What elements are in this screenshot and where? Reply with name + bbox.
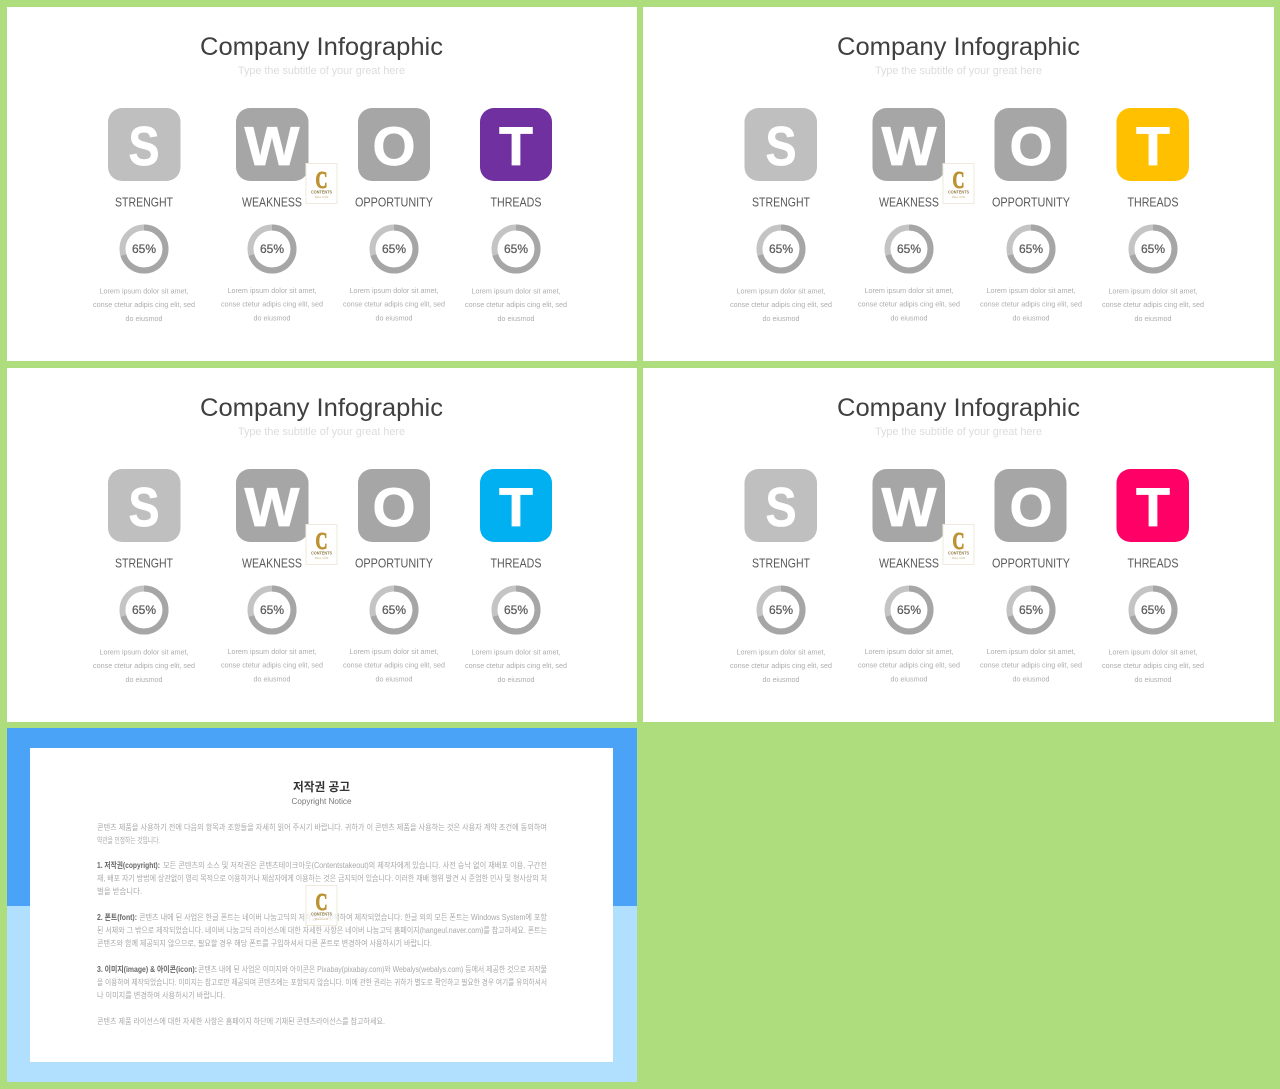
donut: T 65% [494,228,538,270]
text: S description: Lorem ipsum dolor sit amet, [100,286,188,296]
subtitle: Type the subtitle of your great here [875,426,1042,438]
text: T description: conse ctetur adipis cing elit, sed [1102,661,1204,670]
tile: W: W [244,476,300,538]
tile: T [480,469,552,542]
text: T description: do eiusmod [1134,675,1172,684]
text: S description: do eiusmod [762,675,800,684]
text: S description [93,286,195,323]
text: S description: conse ctetur adipis cing elit, sed [93,661,195,670]
notice closing line: 콘텐츠 제품 라이선스에 대한 자세한 사항은 홈페이지 하단에 기재된 콘텐츠라이선스를 참고하세요. [97,1016,385,1026]
title: Company Infographic [200,33,443,61]
watermark logo [306,524,337,564]
notice section 3: image and icon [97,964,547,1000]
text: O description: conse ctetur adipis cing elit, sed [980,300,1082,308]
notice section 3: image and icon: 나 이미지를 변경하여 사용하시기 바랍니다. [97,990,225,1000]
tile: S [108,108,180,181]
watermark logo: C [952,168,964,194]
tile: O [358,469,430,542]
text: O description [980,647,1082,684]
tile: O [994,469,1066,542]
text: O description: do eiusmod [376,674,412,684]
watermark logo: C [316,890,328,916]
text: W description [858,286,960,322]
notice section 1: copyright: 1. 저작권(copyright): [97,860,160,870]
tile: S [744,469,817,542]
tile: S: S [128,476,160,538]
notice section 3: image and icon: 콘텐츠 내에 된 사업은 이미지와 아이콘은 Pixabay(pixabay.com)와 Webalys(webalys.com) 등에서 제공한 것으로 저작물 [198,964,547,974]
donut: T 65%: 65% [504,603,528,617]
text: T description: Lorem ipsum dolor sit amet, [472,648,560,656]
title: Company Infographic [200,394,443,422]
watermark logo: CONTENTS [311,190,332,194]
text: T description [1102,286,1204,323]
donut: W 65%: 65% [897,242,921,256]
notice section 2: font: 콘텐츠와 함께 제공되지 않으므로, 필요할 경우 해당 폰트를 구입하셔서 다른 폰트로 변경하여 사용하시기 바랍니다. [97,938,432,948]
donut: O 65% [372,228,416,270]
text: W description: Lorem ipsum dolor sit amet, [864,647,954,656]
text: W description: do eiusmod [254,674,290,684]
text: O description: Lorem ipsum dolor sit amet, [350,647,438,656]
text: W description: Lorem ipsum dolor sit amet, [228,647,316,656]
panel: SWOT slide amber [643,7,1274,361]
text: O description: do eiusmod [1012,314,1050,322]
notice section 2: font: 된 서체와 그 밖으로 제작되었습니다. 네이버 나눔고딕 라이선스에 대한 자세한 사항은 네이버 나눔고딕 홈페이지(hangeul.naver.com)를 참고하세요. 폰트는 [97,925,547,935]
tile: S [108,469,180,542]
tile: W [236,469,308,542]
tile: T [1116,469,1189,542]
text: W description [858,647,960,684]
text: W description: conse ctetur adipis cing elit, sed [858,660,960,670]
watermark logo: MALL.COM [952,556,965,560]
notice intro paragraph: 콘텐츠 제품을 사용하기 전에 다음의 항목과 조항들을 자세히 읽어 주시기 바랍니다. 귀하가 이 콘텐츠 제품을 사용하는 것은 사용자 계약 조건에 동의하여 [97,822,547,832]
label: threads: THREADS [1128,556,1178,570]
panel: copyright notice slide [7,728,637,1082]
watermark logo: MALL.COM [315,195,328,199]
notice section 3: image and icon: 을 이용하여 제작되었습니다. 이미지는 참고로만 제공되며 콘텐츠에는 포함되지 않습니다. 이에 관한 권리는 귀하가 별도로 확인하고 필요한 경우 여기를 유의하셔서 [97,977,547,987]
text: S description: do eiusmod [126,314,162,323]
title: Company Infographic [837,394,1080,422]
donut: W 65%: 65% [260,603,284,617]
donut: O 65%: 65% [1019,242,1043,256]
label: weakness: WEAKNESS [242,556,302,570]
text: T description [1102,648,1204,684]
label: weakness: WEAKNESS [242,196,302,210]
tile: W [872,108,945,181]
text: W description: do eiusmod [890,314,928,322]
notice intro paragraph [97,822,547,845]
watermark logo: MALL.COM [315,556,328,560]
label: opportunity: OPPORTUNITY [992,196,1071,210]
donut: T 65% [1132,588,1174,632]
text: O description: Lorem ipsum dolor sit amet, [986,647,1076,656]
donut: T 65%: 65% [1141,603,1165,617]
watermark logo: C [952,529,964,555]
label: opportunity: OPPORTUNITY [355,196,434,210]
notice subheading: Copyright Notice [292,796,352,806]
text: S description: conse ctetur adipis cing elit, sed [93,300,195,309]
text: T description [465,648,567,684]
text: O description: do eiusmod [376,314,412,322]
tile: T [1116,108,1189,181]
tile: W: W [244,115,300,177]
label: opportunity: OPPORTUNITY [992,556,1071,570]
label: opportunity: OPPORTUNITY [355,556,434,570]
tile: O: O [372,115,416,177]
label: threads: THREADS [490,556,542,570]
donut: O 65% [1010,588,1052,632]
text: S description [730,286,832,323]
donut: W 65% [250,588,294,632]
text: T description: Lorem ipsum dolor sit amet, [1108,286,1198,296]
text: W description [221,647,323,684]
tile: T: T [1136,115,1170,177]
subtitle: Type the subtitle of your great here [238,65,405,77]
text: O description: conse ctetur adipis cing elit, sed [343,300,445,308]
donut: S 65% [760,588,802,632]
tile: T: T [499,115,533,177]
watermark logo: C [316,168,328,194]
tile: W [236,108,308,181]
text: W description: Lorem ipsum dolor sit amet, [228,286,316,295]
text: S description: Lorem ipsum dolor sit amet, [736,648,826,656]
text: T description: conse ctetur adipis cing elit, sed [465,661,567,670]
label: weakness: WEAKNESS [879,196,939,210]
watermark logo: C [316,529,328,555]
subtitle: Type the subtitle of your great here [875,65,1042,77]
tile: O: O [372,476,416,538]
watermark logo [306,886,337,926]
donut: O 65% [372,588,416,632]
notice section 2: font [97,912,548,948]
text: W description: do eiusmod [890,674,928,684]
text: O description: do eiusmod [1012,674,1050,684]
tile: S [744,108,817,181]
label: strenght: STRENGHT [115,196,173,210]
donut: S 65% [122,588,166,632]
watermark logo: CONTENTS [948,190,969,194]
text: O description: Lorem ipsum dolor sit amet, [350,286,438,295]
watermark logo [943,164,974,204]
text: O description [343,647,445,684]
text: T description [465,286,567,323]
donut: T 65% [494,588,538,632]
label: weakness: WEAKNESS [879,556,939,570]
text: S description: conse ctetur adipis cing elit, sed [730,300,832,309]
notice section 1: copyright: 벌을 받습니다. [97,886,142,896]
text: O description: conse ctetur adipis cing elit, sed [980,660,1082,670]
text: S description: conse ctetur adipis cing elit, sed [730,661,832,670]
donut: S 65% [760,228,802,270]
notice section 1: copyright: 모든 콘텐츠의 소스 및 저작권은 콘텐츠테이크아웃(Contentstakeout)의 제작자에게 있습니다. 사전 승낙 없이 재배포 이용, 구간전 [163,860,547,870]
tile: S: S [766,476,796,538]
notice section 2: font: 2. 폰트(font): [97,913,137,922]
watermark logo [943,524,974,564]
text: O description [343,286,445,322]
donut: W 65%: 65% [260,242,284,256]
donut: O 65%: 65% [382,603,406,617]
donut: S 65%: 65% [132,242,156,256]
tile: W: W [882,115,937,177]
text: T description: do eiusmod [1134,314,1172,323]
donut: T 65% [1132,228,1174,270]
watermark logo: CONTENTS [948,550,969,556]
text: W description: conse ctetur adipis cing elit, sed [858,300,960,308]
label: threads: THREADS [1128,196,1178,210]
text: S description: do eiusmod [126,675,162,684]
text: W description: conse ctetur adipis cing elit, sed [221,660,323,670]
tile: O: O [1010,476,1052,538]
title: Company Infographic [837,33,1080,61]
text: W description: do eiusmod [254,314,290,322]
notice section 2: font: 콘텐츠 내에 된 사업은 한글 폰트는 네이버 나눔고딕의 저작물로 제작하여 제작되었습니다. 한글 외의 모든 폰트는 Windows System에 포함 [139,912,548,922]
tile: W: W [882,476,937,538]
text: T description: Lorem ipsum dolor sit amet, [472,286,560,296]
donut: S 65% [122,228,166,270]
donut: W 65% [250,228,294,270]
tile: S: S [128,115,160,177]
tile: T: T [1136,476,1170,538]
subtitle: Type the subtitle of your great here [238,426,405,438]
text: S description: do eiusmod [762,314,800,323]
text: S description: Lorem ipsum dolor sit amet, [100,648,188,656]
text: S description [730,648,832,684]
text: T description: Lorem ipsum dolor sit amet, [1108,648,1198,656]
watermark logo: MALL.COM [315,917,328,921]
text: O description [980,286,1082,322]
donut: S 65%: 65% [769,242,793,256]
watermark logo [306,164,337,204]
watermark logo: CONTENTS [311,550,332,556]
panel: SWOT slide purple [7,7,637,361]
tile: T: T [499,476,533,538]
donut: W 65% [888,228,930,270]
text: W description: Lorem ipsum dolor sit amet, [864,286,954,295]
tile: T [480,108,552,181]
panel: SWOT slide cyan [7,368,637,722]
tile: W [872,469,945,542]
text: T description: do eiusmod [498,314,534,323]
donut: O 65% [1010,228,1052,270]
notice section 1: copyright: 재, 배포 자기 방법에 상관없이 영리 목적으로 이용하거나 제삼자에게 이용하는 것은 금지되어 있습니다. 이러한 재배 행위 발견 시 준엄한 민사 및 형사상의 처 [97,873,547,883]
donut: S 65%: 65% [769,603,793,617]
tile: S: S [766,115,796,177]
watermark logo: MALL.COM [952,195,965,199]
text: O description: Lorem ipsum dolor sit amet, [986,286,1076,295]
tile: O [358,108,430,181]
tile: O: O [1010,115,1052,177]
donut: O 65%: 65% [1019,603,1043,617]
label: strenght: STRENGHT [752,556,810,570]
donut: O 65%: 65% [382,242,406,256]
notice intro paragraph: 약관을 인정하는 것입니다. [97,835,160,845]
notice section 1: copyright [97,860,547,896]
text: O description: conse ctetur adipis cing elit, sed [343,660,445,670]
label: strenght: STRENGHT [752,196,810,210]
panel: SWOT slide pink [643,368,1274,722]
text: T description: conse ctetur adipis cing elit, sed [465,300,567,309]
label: strenght: STRENGHT [115,556,173,570]
watermark logo: CONTENTS [311,912,332,916]
notice heading: 저작권 공고 [293,779,350,794]
text: T description: do eiusmod [498,675,534,684]
text: S description [93,648,195,684]
donut: S 65%: 65% [132,603,156,617]
notice section 3: image and icon: 3. 이미지(image) & 아이콘(icon): [97,964,197,974]
text: T description: conse ctetur adipis cing elit, sed [1102,300,1204,309]
tile: O [994,108,1066,181]
label: threads: THREADS [490,196,542,210]
text: W description [221,286,323,322]
donut: T 65%: 65% [504,242,528,256]
donut: W 65%: 65% [897,603,921,617]
text: W description: conse ctetur adipis cing elit, sed [221,300,323,308]
donut: T 65%: 65% [1141,242,1165,256]
text: S description: Lorem ipsum dolor sit amet, [736,286,826,296]
donut: W 65% [888,588,930,632]
